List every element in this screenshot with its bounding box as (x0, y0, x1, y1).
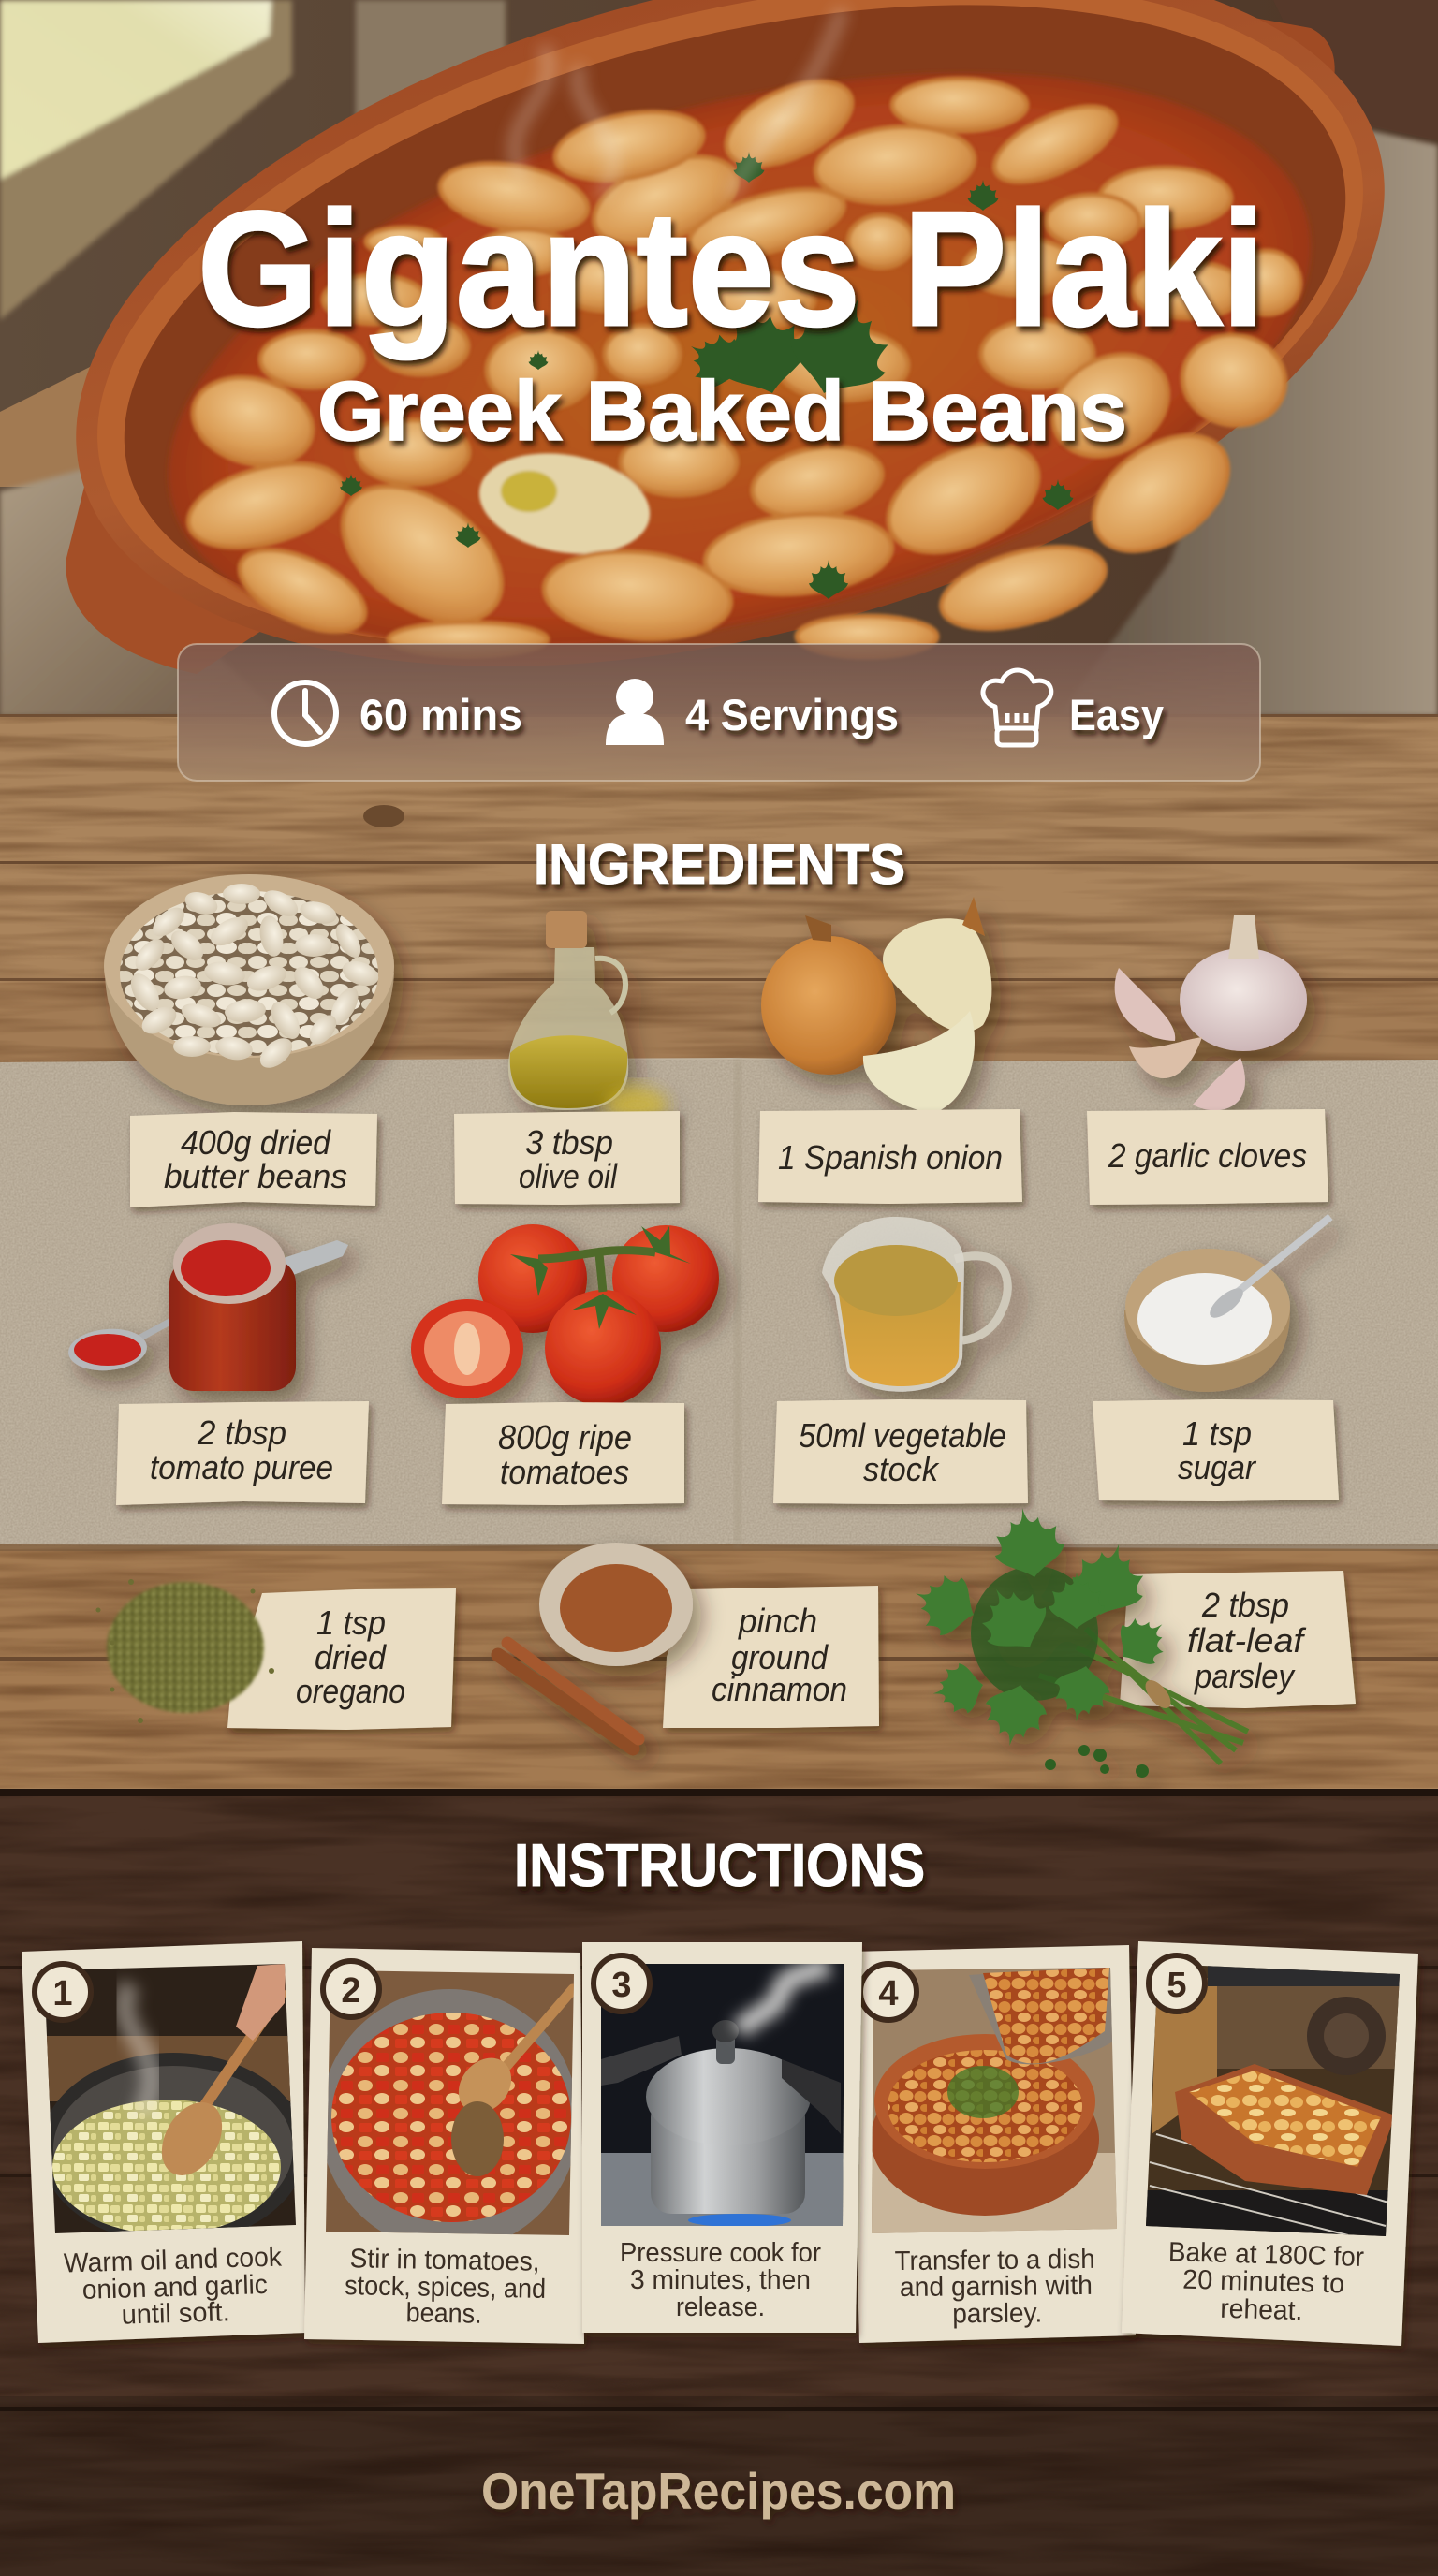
step 3 badge (594, 1955, 650, 2012)
icon: tomato puree jar and spoon (66, 1223, 348, 1391)
ingredient label: olive oil (454, 1111, 680, 1205)
icon: Spanish onion (761, 897, 991, 1114)
linen table runner (0, 1058, 1438, 1551)
icon: bowl of dried butter beans (104, 874, 394, 1105)
ingredient label: cinnamon: ground (731, 1638, 829, 1676)
step 2 text: Stir in tomatoes, (349, 2244, 540, 2277)
step 3 photo: pressure cooker (599, 1961, 847, 2228)
wooden table top right (1273, 0, 1438, 140)
ingredient label: vegetable stock: 50ml vegetable (799, 1416, 1006, 1455)
parsley garnish (340, 152, 1073, 599)
ingredient label: olive oil: olive oil (519, 1157, 618, 1195)
step 4 text: parsley. (952, 2298, 1042, 2329)
hero photo: baked beans dish (0, 0, 1438, 789)
dark wood background: instructions section (0, 1789, 1438, 2576)
step 3 text: 3 minutes, then (630, 2265, 811, 2295)
step 4 badge (860, 1964, 917, 2020)
difficulty text: Easy (1069, 690, 1164, 739)
footer website: OneTapRecipes.com (481, 2462, 956, 2520)
terracotta dish (3, 0, 1438, 789)
step card 1 (22, 1941, 306, 2343)
step 4 text (894, 2245, 1095, 2330)
ingredient label: olive oil: 3 tbsp (525, 1123, 613, 1162)
step 1 text: onion and garlic (81, 2270, 268, 2305)
ingredient label: tomato puree: 2 tbsp (197, 1413, 286, 1452)
step 5 text: 20 minutes to (1182, 2265, 1345, 2299)
step 3 text: Pressure cook for (620, 2238, 821, 2268)
title: Gigantes Plaki (198, 177, 1265, 359)
step 1 text: Warm oil and cook (64, 2243, 283, 2278)
butter beans (180, 65, 1300, 657)
icon: clock (274, 682, 336, 744)
icon: bowl of sugar (1124, 1217, 1330, 1392)
heading: instructions: INSTRUCTIONS (514, 1831, 925, 1899)
step card 3 (582, 1942, 862, 2333)
step 3 badge: 3 (611, 1966, 632, 2005)
window with daylight (0, 0, 506, 320)
step card 2 (304, 1948, 584, 2344)
ingredient label: butter beans: 400g dried (181, 1123, 331, 1162)
ingredient label: vegetable stock: stock (863, 1450, 940, 1488)
step 2 badge (323, 1961, 379, 2017)
icon: ripe tomatoes (411, 1224, 719, 1406)
ingredient label: sugar: sugar (1178, 1448, 1257, 1486)
icon: person (606, 679, 664, 745)
step 2 badge: 2 (341, 1971, 361, 2011)
ingredient label: oregano: 1 tsp (316, 1603, 386, 1642)
step 1 photo: onions in pan (46, 1964, 296, 2233)
icon: olive oil bottle (508, 911, 667, 1121)
step 4 text: Transfer to a dish (894, 2245, 1095, 2276)
ingredient label: cinnamon: pinch (738, 1602, 817, 1640)
ingredient label: parsley (1120, 1571, 1356, 1708)
step 4 text: and garnish with (900, 2271, 1093, 2303)
icon: cinnamon sticks (498, 1643, 638, 1749)
ingredient label: oregano: oregano (296, 1672, 405, 1710)
icon: flat-leaf parsley bunch (905, 1502, 1248, 1778)
step 2 photo: stew in pot (326, 1971, 574, 2235)
step 3 text: release. (676, 2292, 765, 2322)
heading: ingredients: INGREDIENTS (534, 833, 905, 896)
step 1 text (64, 2243, 285, 2332)
ingredient label: parsley: 2 tbsp (1201, 1586, 1289, 1624)
step 5 badge: 5 (1167, 1966, 1187, 2005)
step 5 badge (1149, 1955, 1205, 2012)
step 2 text: beans. (405, 2298, 482, 2330)
step 5 photo: dish in oven (1142, 1961, 1404, 2242)
ingredient label: parsley: parsley (1194, 1657, 1296, 1695)
ingredient label: vegetable stock (773, 1399, 1028, 1504)
ingredient label: ripe tomatoes (442, 1402, 684, 1505)
ingredient label: onion: 1 Spanish onion (778, 1138, 1003, 1177)
icon: measuring jug of stock (822, 1217, 1007, 1392)
info bar (178, 644, 1260, 781)
icon: ground cinnamon bowl (539, 1543, 693, 1666)
ingredient label: cinnamon (663, 1586, 879, 1728)
step 2 text: stock, spices, and (345, 2271, 546, 2305)
title (198, 177, 1265, 459)
step 1 badge (35, 1964, 91, 2020)
step 4 photo: transfer to dish (866, 1961, 1119, 2237)
step 3 text (620, 2238, 821, 2322)
ingredient label: butter beans (130, 1112, 377, 1208)
ingredient label: oregano (227, 1588, 456, 1730)
icon: garlic (1115, 915, 1307, 1110)
step 4 badge: 4 (878, 1974, 899, 2013)
step 1 text: until soft. (121, 2297, 230, 2331)
step 5 text: reheat. (1220, 2294, 1303, 2326)
ingredient label: onion (758, 1109, 1022, 1204)
icon: dried oregano pile (95, 1579, 274, 1723)
ingredient label: ripe tomatoes: 800g ripe (498, 1418, 632, 1456)
step 5 text: Bake at 180C for (1168, 2237, 1365, 2273)
table edge left (0, 367, 90, 487)
ingredient label: butter beans: butter beans (164, 1157, 347, 1195)
ingredient label: oregano: dried (315, 1638, 387, 1676)
subtitle: Greek Baked Beans (317, 365, 1127, 459)
ingredient label: ripe tomatoes: tomatoes (500, 1453, 629, 1491)
ingredient label: garlic (1087, 1109, 1328, 1205)
ingredient label: tomato puree: tomato puree (150, 1448, 333, 1486)
ingredient label: garlic: 2 garlic cloves (1108, 1136, 1307, 1175)
steam (515, 9, 843, 197)
step card 5 (1122, 1941, 1418, 2346)
ingredient label: cinnamon: cinnamon (712, 1670, 847, 1708)
step 5 text (1167, 2237, 1365, 2328)
ingredient label: tomato puree (116, 1401, 369, 1505)
step card 4 (849, 1945, 1136, 2343)
dish handles (66, 487, 260, 669)
icon: chef hat (983, 670, 1051, 745)
linen cloth (0, 122, 1438, 716)
ingredient label: sugar (1093, 1399, 1339, 1501)
ingredient label: sugar: 1 tsp (1182, 1414, 1252, 1453)
tomato sauce (168, 73, 1312, 644)
step 1 badge: 1 (52, 1974, 73, 2013)
ingredient label: parsley: flat-leaf (1187, 1621, 1307, 1660)
wood table background: ingredients section (0, 714, 1438, 1791)
step 2 text (344, 2244, 547, 2331)
servings text: 4 Servings (685, 690, 899, 739)
time text: 60 mins (360, 690, 522, 739)
